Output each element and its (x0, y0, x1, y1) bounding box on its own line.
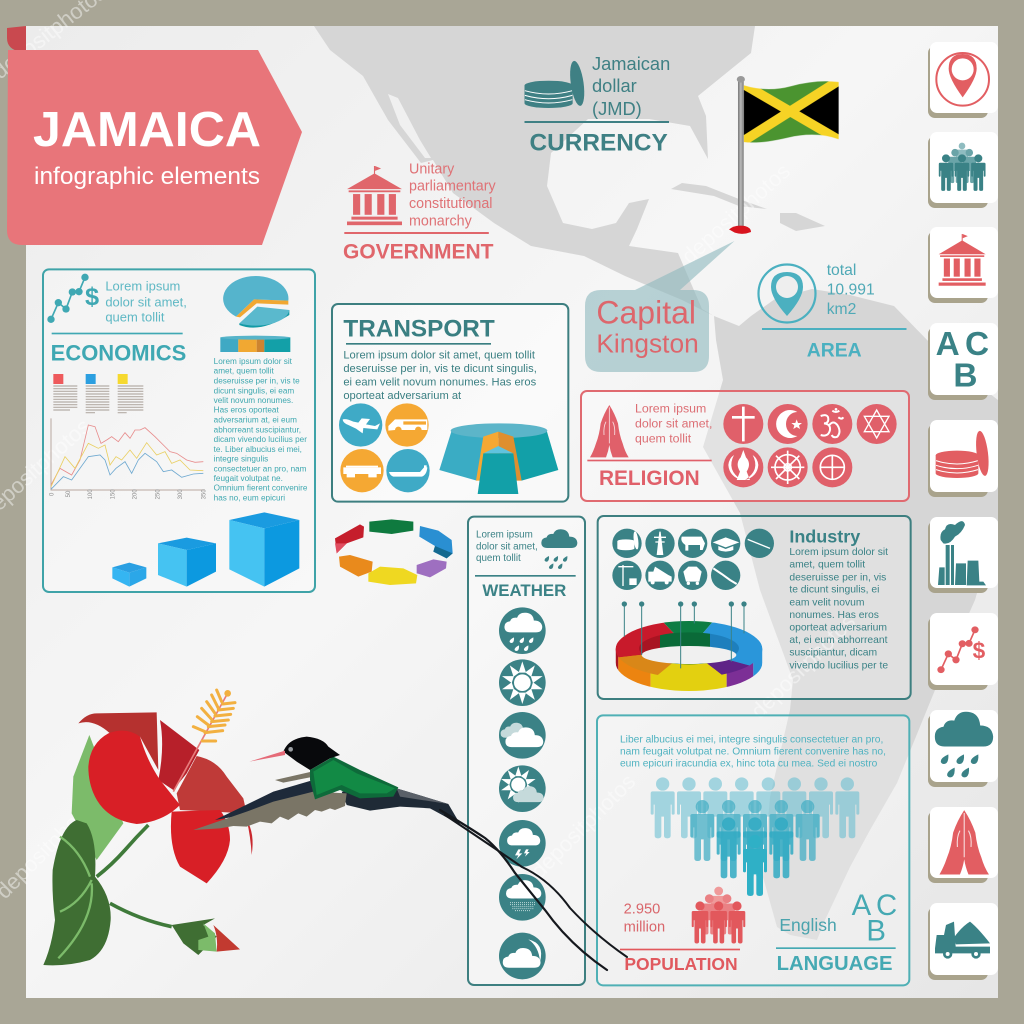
icon: rain tile (935, 712, 993, 777)
icon: growth chart and dollar (47, 274, 99, 323)
title: JAMAICA (33, 103, 261, 157)
currency name (592, 53, 670, 119)
government type: Unitary (409, 161, 455, 177)
body text: te dicunt singulis, ei (789, 585, 879, 596)
illustration: hummingbird (193, 737, 461, 830)
area value: 10.991 (827, 281, 875, 298)
currency name: Jamaican (592, 53, 670, 74)
intro text (105, 279, 187, 325)
body text: te. Liber albucius ei mei, (214, 445, 302, 454)
language value: English (779, 915, 837, 935)
icon: crescent and star (768, 404, 808, 444)
heading: industry: Industry (789, 527, 860, 547)
intro text: quem tollit (476, 553, 521, 564)
callout: capital (585, 241, 734, 372)
icon: tanker train (340, 449, 384, 492)
intro text: eum epicuri iracundia ex, hinc tota cu mea. Sed ei nostro (620, 759, 878, 770)
panel: government (343, 161, 496, 263)
body text: amet, quem tollit (214, 367, 274, 376)
body text: oporteat adversarium (789, 622, 887, 633)
Jamaica island (729, 226, 751, 234)
body text: velit novum nonumes. (214, 396, 293, 405)
intro text: quem tollit (105, 310, 165, 325)
line chart: 250 (155, 489, 161, 499)
panel: area (758, 262, 906, 362)
icon: graduation cap (711, 529, 740, 558)
icon: letters tile: B (953, 358, 977, 395)
panel: religion (581, 391, 909, 501)
intro text: dolor sit amet, (476, 541, 538, 552)
intro text: nam feugait volutpat ne. Omnium fierent convenire has no, (620, 747, 886, 758)
icon: rain (499, 607, 546, 654)
icon: praying hands tile (939, 810, 989, 874)
heading: economics: ECONOMICS (51, 341, 186, 366)
intro text (620, 735, 886, 770)
body text: nonumes. Has eros (789, 610, 879, 621)
icon: sun (499, 659, 546, 706)
callout: capital: Kingston (596, 329, 699, 359)
heading: religion: RELIGION (599, 467, 700, 490)
icon: letters ABC (852, 889, 897, 948)
heading: currency: CURRENCY (530, 130, 668, 157)
line chart: 50 (66, 490, 72, 497)
cube bars (112, 512, 299, 587)
body text (789, 547, 888, 671)
icon: snow (499, 874, 546, 921)
flag of Jamaica with pole (729, 76, 841, 234)
heading: population: POPULATION (624, 954, 738, 974)
heading: weather: WEATHER (482, 581, 566, 600)
line chart: 300 (178, 489, 184, 499)
government type: monarchy (409, 213, 473, 229)
intro text (635, 402, 712, 446)
icon: map pin (758, 264, 816, 322)
icon: dump truck (645, 561, 675, 590)
icon: syringe (711, 561, 740, 590)
area value: total (827, 262, 856, 279)
body text: at, ei eum abhorreant (789, 635, 888, 646)
body text (214, 357, 308, 503)
icon: khanda (723, 447, 763, 487)
body text: Has eros oporteat (214, 406, 279, 415)
body text: Lorem ipsum dolor sit amet, quem tollit (343, 349, 536, 361)
icon: thunderstorm (499, 820, 546, 867)
icon: coins (612, 529, 642, 558)
intro text: quem tollit (635, 432, 692, 446)
heading: transport: TRANSPORT (343, 316, 495, 343)
body text: dicunt singulis, ei eam (214, 386, 294, 395)
icon: airplane (339, 403, 382, 447)
icon: rifle (745, 529, 774, 558)
government type: parliamentary (409, 179, 496, 195)
icon: cloudy (499, 712, 546, 759)
panel: economics (43, 269, 315, 592)
icon: growth tile (937, 626, 986, 673)
intro text: dolor sit amet, (105, 294, 187, 309)
panel: currency (524, 53, 670, 157)
line chart (49, 418, 207, 499)
panel: transport (332, 304, 568, 502)
icon: letters ABC: C (876, 889, 897, 922)
icon: crane (612, 561, 642, 590)
icon: dharma wheel (768, 447, 808, 487)
currency name: dollar (592, 75, 637, 96)
body text: Lorem ipsum dolor sit (789, 547, 888, 558)
icon: sun behind cloud (499, 765, 546, 812)
body text: deseruisse per in, vis te (214, 377, 300, 386)
body text: deseruisse per in, vis (789, 572, 886, 583)
body text: consectetuer an pro, nam (214, 464, 307, 473)
body text: abhorreant suscipiantur, (214, 425, 301, 434)
line chart: 100 (88, 489, 94, 499)
icon: ship (386, 449, 430, 492)
icon: praying hands (590, 405, 629, 457)
title ribbon (7, 26, 302, 245)
icon: bus (385, 403, 429, 447)
flower bud (172, 918, 240, 955)
icon: truck tile (935, 922, 990, 959)
cylinder segment (220, 336, 290, 352)
intro text: Lorem ipsum (635, 402, 706, 416)
icon: coins tile (936, 430, 991, 478)
icon: om (812, 404, 852, 444)
world map background (314, 26, 998, 940)
area value (827, 262, 875, 318)
line chart: 150 (110, 489, 116, 499)
currency name: (JMD) (592, 98, 642, 119)
body text: suscipiantur, dicam (789, 648, 877, 659)
body text: integre singulis (214, 455, 268, 464)
leaves (43, 820, 111, 965)
government type: constitutional (409, 196, 492, 212)
icon: cow (678, 529, 707, 558)
body text: has no, eum epicuri (214, 494, 285, 503)
3D ring chart segment (439, 423, 558, 494)
icon: letters tile: C (965, 326, 989, 363)
chart legend (53, 374, 143, 413)
intro text: Liber albucius ei mei, integre singulis consectetuer an pro, (620, 735, 883, 746)
icon: government tile (939, 234, 986, 286)
line chart: 350 (201, 489, 207, 499)
callout: capital: Capital (596, 294, 696, 330)
icon: growth tile: $ (973, 637, 986, 663)
body text: feugait volutpat ne. (214, 474, 283, 483)
line chart: 200 (133, 489, 139, 499)
intro text: Lorem ipsum (476, 529, 533, 540)
illustration: hibiscus flower (43, 690, 253, 965)
government type (409, 161, 496, 229)
icon: letters ABC: A (852, 889, 872, 922)
icon: rain cloud (541, 529, 577, 569)
intro text: dolor sit amet, (635, 417, 712, 431)
icon: letters tile (936, 326, 989, 395)
body text: dicam vivendo lucilius per (214, 435, 307, 444)
hummingbird tail streamers (440, 810, 627, 970)
icon: growth chart and dollar: $ (85, 283, 99, 311)
heading: area: AREA (807, 340, 862, 362)
body text: Omnium fierent convenire (214, 484, 308, 493)
stamen (173, 690, 235, 792)
icon: moon and cloud (499, 933, 546, 979)
pie chart (223, 276, 289, 328)
subtitle: infographic elements (34, 163, 260, 190)
icon: coins (524, 60, 587, 108)
icon: people tile (939, 143, 986, 191)
icon: cross (723, 404, 763, 444)
watermarks: depositphotos (746, 609, 860, 724)
watermarks (0, 0, 860, 904)
icon: letters ABC: B (866, 915, 886, 948)
population value: 2.950 (624, 901, 660, 917)
line chart: 0 (49, 492, 55, 496)
population value (624, 901, 665, 936)
icon: population group (692, 887, 745, 943)
donut chart with pins (616, 601, 762, 691)
heading: government: GOVERNMENT (343, 240, 494, 263)
body text: eam velit novum (789, 597, 865, 608)
body text: Lorem ipsum dolor sit (214, 357, 293, 366)
sidebar: icon tiles (928, 42, 998, 980)
body text: vivendo lucilius per te (789, 660, 888, 671)
body text: oporteat adversarium at (343, 390, 462, 402)
stems (97, 825, 172, 927)
icon: power pylon (645, 529, 675, 558)
body text (343, 349, 537, 402)
people pyramid (651, 777, 859, 896)
heading: language: LANGUAGE (777, 953, 893, 975)
body text: ei eam velit novum nonumes. Has eros (343, 377, 537, 389)
icon: location pin tile (936, 53, 989, 106)
panel: population and language (597, 715, 909, 985)
body text: adversarium at, ei eum (214, 416, 297, 425)
body text: amet, quem tollit (789, 560, 865, 571)
intro text: Lorem ipsum (105, 279, 180, 294)
icon: star of david (857, 404, 897, 444)
watermarks: depositphotos (526, 769, 640, 884)
icon: government building (347, 166, 402, 225)
area value: km2 (827, 301, 856, 318)
watermarks: depositphotos (677, 158, 795, 269)
panel: weather (468, 517, 585, 985)
icon: circle cross (812, 447, 852, 487)
segmented ring chart (335, 519, 453, 585)
icon: factory tile (938, 521, 986, 585)
icon: letters tile: A (936, 326, 960, 363)
population value: million (624, 920, 665, 936)
intro text (476, 529, 538, 564)
panel: industry (598, 516, 911, 700)
body text: deseruisse per in, vis te dicunt singulis, (343, 363, 537, 375)
icon: mine cart (678, 561, 707, 590)
